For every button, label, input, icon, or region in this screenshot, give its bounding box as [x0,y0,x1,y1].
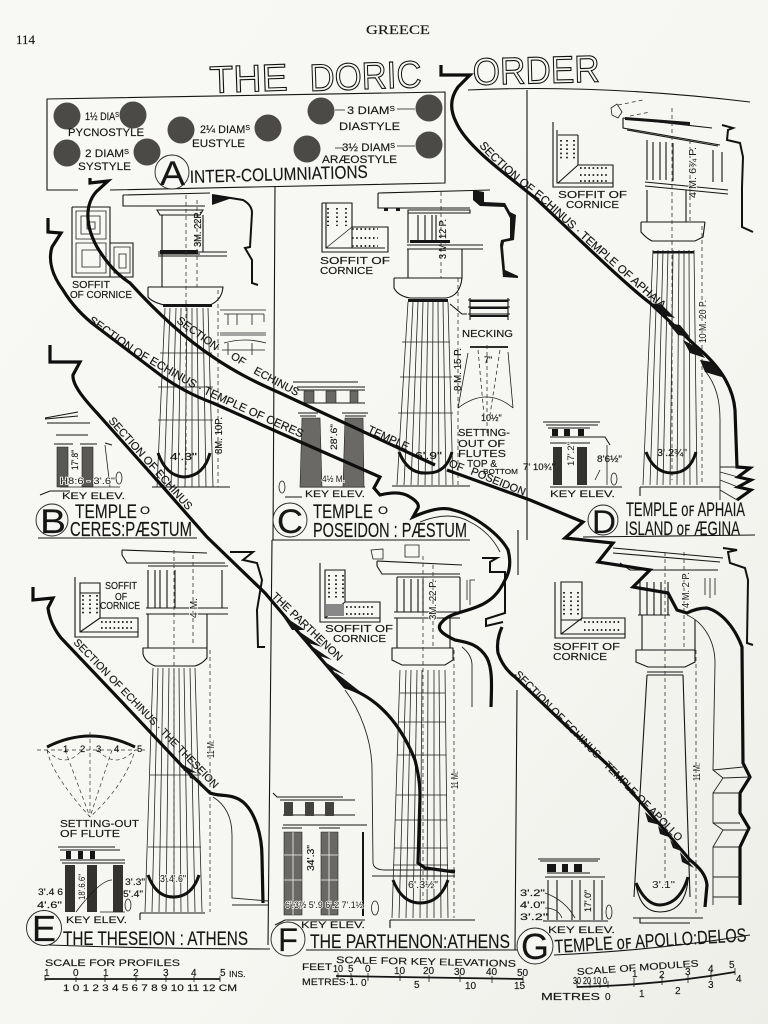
style labels: PYCNOSTYLE [68,127,144,139]
key elevation G: 3'.2" [520,912,548,923]
column D dimensions: 4 M. 6¾ P. [687,147,699,198]
scale for key elevations: 5 [348,964,354,975]
key elevation D: 8'6½" [597,454,622,465]
scale for key elevations: SCALE FOR KEY ELEVATIONS [336,955,516,970]
cornice profile D [722,125,753,232]
setting-out of flutes [458,345,518,476]
column C dimensions [415,219,464,462]
panel A letter: A [160,155,185,193]
section of echinus: Temple of Poseidon: POSEIDON [469,466,527,499]
rules between panels [38,88,755,955]
page number: 114 [16,32,36,47]
label C: POSEIDON : PÆSTUM [313,520,467,542]
soffit G: CORNICE [553,652,607,663]
panel C: Temple of Poseidon [273,190,518,542]
section of echinus: Temple of Ceres [46,218,512,707]
setting-out of flute E: 5 [137,744,142,755]
panel D: Temple of Aphaia [523,100,753,540]
scale of modules: 30 20 10 0 [573,976,607,987]
cornice profile C [473,190,518,278]
column F dimensions: 11 M. [449,771,461,789]
column F dimensions: 6'.3½" [408,879,438,891]
key elevation C: 28'.6" [329,424,340,450]
column G dimensions: 4 M. 2 P. [680,572,692,608]
column D dimensions: 3'.2¾" [657,447,687,459]
title: ORDER [472,49,600,94]
soffit F: SOFFIT OF [325,624,393,635]
column B dimensions: 4'.3" [170,452,198,463]
setting-out of flute E [37,732,145,840]
section of echinus: Temple of Poseidon: OF [228,350,248,369]
style labels: SYSTYLE [78,161,131,173]
soffit D: SOFFIT OF [558,190,627,201]
key elevation B: KEY ELEV. [62,491,125,502]
key elevation E [37,847,145,926]
key elevation C: 4½ M. [322,474,345,485]
style labels: S [390,106,395,113]
scale for key elevations: 30 [454,967,466,978]
key elevation F: 34'.3" [306,845,317,871]
column G dimensions: 3'.1" [652,879,675,891]
section of echinus: Temple of Poseidon: ECHINUS [252,365,301,399]
style labels: ARÆOSTYLE [322,154,397,166]
column E dimensions: 11 M. [205,740,217,758]
label E [26,908,248,950]
scale of modules: 2 [659,970,665,981]
cornice profile G [723,548,753,645]
soffit B: OF CORNICE [70,290,132,301]
key elevation B [40,412,125,502]
scale of modules: 1 [639,989,645,1000]
scale of modules: 4 [708,964,714,975]
column F dimensions: 3M. 22 P. [427,580,439,620]
scale of modules: 1 [632,969,638,980]
key elevation E: 3'.4 6 [38,887,63,898]
panel G: Temple of Apollo [517,548,753,967]
column circles [54,94,442,166]
section of echinus: Temple of Poseidon [88,178,750,905]
necking detail [450,298,513,340]
section of echinus: Temple of Poseidon: SECTION [174,315,221,353]
panel F: The Parthenon [271,545,510,958]
column B dimensions: 8M. 10P. [214,417,225,454]
soffit E: CORNICE [100,601,140,612]
key elevation F: 6'.3½ 5'.9 6'.2 7'.1½ [285,900,363,910]
scale for key elevations [302,955,529,992]
section of echinus: Temple of Poseidon: OF [447,458,466,475]
key elevation F [273,793,378,931]
section of echinus: Temple of Aphaia: SECTION OF ECHINUS · TEMPLE OF APHAIA [480,142,665,306]
scale for profiles: 1 [103,968,109,979]
panel E: The Theseion [26,550,265,950]
scale for profiles: 3 [163,968,169,979]
scale for key elevations: 10 [333,964,343,975]
section of echinus: The Parthenon: SECTION OF ECHINUS [109,417,192,510]
column E [122,550,228,920]
column D dimensions: 10 M. 20 P. [697,300,709,343]
label F: F [278,922,298,958]
key elevation B: 17'.8" [70,450,80,470]
soffit F [320,563,393,645]
scale of modules: 3 [708,980,714,991]
column C dimensions: 8 M. 15 P. [452,348,464,391]
scale for key elevations: METRES·1. [302,977,358,987]
scale for profiles: 1 0 1 2 3 4 5 6 7 8 9 10 11 12 CM [63,983,237,993]
scale for key elevations: 0 [361,978,367,989]
label C [273,502,467,542]
key elevation E: KEY ELEV. [66,915,127,926]
key elevation E: 5'.4" [123,889,143,900]
column G dimensions [652,572,703,891]
scale for key elevations: 5 [414,980,420,991]
detail B [220,310,266,355]
style labels: S [115,112,119,119]
scale of modules: SCALE OF MODULES [576,959,699,978]
label B: TEMPLE [75,502,137,523]
scale for profiles: 1 [44,968,50,979]
key elevation E: 3'.3" [125,877,145,888]
soffit D: CORNICE [566,200,619,211]
panel B: Temple of Ceres [36,193,266,541]
soffit C: CORNICE [320,266,373,277]
scale of modules: 0 [605,992,611,1003]
column E dimensions: 3'.4'.6" [160,873,186,885]
scale for profiles: 2 [133,968,139,979]
setting-out of flutes: OUT OF [458,439,505,450]
soffit E [75,577,140,637]
label C: C [277,503,303,541]
section of echinus: Temple of Aphaia [439,65,756,502]
label E: E [32,908,56,949]
soffit C [320,203,390,277]
scale of modules: 5 [729,960,735,971]
column E dimensions: 4 M. [188,598,200,618]
label B: B [40,503,66,541]
label C: O [378,505,389,517]
style labels [68,105,400,173]
title [209,49,600,102]
label G: G [521,926,549,967]
soffit G [553,582,625,663]
scale for key elevations: FEET [302,962,333,972]
key elevation G: 3'.2" [520,888,545,899]
setting-out of flutes: FLUTES [458,449,506,460]
setting-out of flutes: TOP & [467,459,497,470]
label B [36,502,192,541]
key elevation C [279,382,368,500]
title: THE [209,57,288,102]
soffit G: SOFFIT OF [553,642,620,653]
scale for profiles: SCALE FOR PROFILES [45,958,180,969]
key elevation D: 7' 10¾" [523,462,555,473]
soffit F: CORNICE [333,634,386,645]
section of echinus: Temple of Apollo: SECTION OF ECHINUS · TEMPLE OF APOLLO [515,671,682,840]
label E: THE THESEION : ATHENS [63,929,248,950]
scale for key elevations: 50 [517,968,529,979]
scale for key elevations: 20 [423,966,435,977]
column D dimensions [657,147,709,459]
section of echinus: The Parthenon: THE PARTHENON [273,592,343,661]
style labels: DIASTYLE [339,121,400,133]
key elevation D: KEY ELEV. [550,489,615,500]
scale of modules: 3 [685,967,691,978]
column B [123,193,230,487]
style labels: S [124,149,129,156]
panel A letter [155,155,189,193]
style labels: 3½ DIAM [342,142,388,154]
style labels: 2¼ DIAM [200,124,246,136]
soffit E: OF [115,592,127,603]
setting-out of flute E: 1 [63,744,68,755]
label F: THE PARTHENON:ATHENS [310,932,510,953]
scale for key elevations: 0 [365,964,371,975]
scale for profiles: INS. [229,969,246,979]
setting-out of flutes: 7" [484,355,492,365]
section of echinus: The Theseion [31,587,268,906]
scale for profiles: 4 [191,968,197,979]
column B dimensions [170,211,225,463]
section of echinus: Temple of Poseidon: TEMPLE [366,424,411,453]
scale for key elevations: 10 [394,966,406,977]
key elevation G: 17'.0" [583,890,594,912]
column G [613,548,723,923]
key elevation E: 4'.6" [37,900,62,911]
key elevation C: KEY ELEV. [305,489,365,500]
scale for key elevations: 10 [465,981,477,992]
label D: D [592,504,616,540]
soffit B: SOFFIT [72,280,110,291]
column G dimensions: 11 M. [691,763,703,781]
soffit D [553,122,627,211]
section of echinus: The Theseion: SECTION OF ECHINUS · THE THESEION [74,639,219,788]
soffit E: SOFFIT [105,581,137,592]
setting-out of flutes: BOTTOM [483,467,518,476]
setting-out of flute E: 2 [80,744,85,755]
scale for key elevations: 40 [486,967,498,978]
label C: TEMPLE [313,502,373,523]
cornice profile B [212,195,258,285]
key elevation E: 18'.6.6" [77,874,88,900]
key elevation G [520,859,615,936]
label D [588,500,745,540]
column B dimensions: 3M. 22P. [193,211,204,247]
title: DORIC [309,54,422,100]
scale for profiles: 0 [73,968,79,979]
soffit C: SOFFIT OF [320,256,390,267]
column F dimensions [408,580,461,891]
necking detail: NECKING [462,329,513,340]
setting-out of flute E: OF FLUTE [60,829,120,840]
section of echinus: Temple of Apollo [496,626,709,908]
key elevation G: KEY ELEV. [548,925,615,936]
key elevation G: 4'.0" [520,900,545,911]
setting-out of flutes: SETTING- [458,428,510,439]
spacing arrows [335,109,415,148]
key elevation D: 17'.2" [566,442,577,466]
style labels: 3 DIAM [347,105,384,117]
style labels: 1½ DIA [85,111,122,123]
column D [611,100,728,496]
setting-out of flute E: 4 [114,744,119,755]
style labels: EUSTYLE [192,138,245,150]
column C dimensions: 6'.9" [415,450,442,462]
label G [517,925,747,967]
scale for profiles [44,958,246,993]
style labels: S [390,143,395,150]
soffit B [70,207,133,301]
cornice profile F [482,558,505,626]
label F [271,922,510,958]
panel A heading: INTER-COLUMNIATIONS [190,162,368,187]
label B: O [140,505,151,517]
section of echinus: The Parthenon [48,345,456,876]
style labels: 2 DIAM [85,148,122,160]
key elevation D [523,422,622,500]
scale for key elevations: 15 [514,981,526,992]
key elevation B: H8:6 - 3'.6" [60,476,115,486]
scale of modules: 2 [675,986,681,997]
panel A: inter-columniations [47,92,445,193]
key elevation F: KEY ELEV. [301,920,365,931]
column C dimensions: 3 M. 12 P. [437,219,449,259]
column C [378,190,490,486]
column E dimensions [160,598,217,885]
scale of modules: METRES [541,991,600,1003]
style labels: S [245,125,250,132]
setting-out of flute E: 3 [96,744,101,755]
scale of modules [541,959,742,1003]
label B: CERES:PÆSTUM [70,519,192,541]
scale of modules: 4 [736,974,742,985]
column F [371,545,475,928]
running head: GREECE [366,22,430,37]
cornice profile E [230,552,265,647]
setting-out of flutes: 10½" [481,413,502,423]
scale for profiles: 5 [220,968,226,979]
section of echinus: Temple of Ceres: SECTION OF ECHINUS · TEMPLE OF CERES [90,316,304,437]
setting-out of flute E: SETTING-OUT [60,819,139,830]
